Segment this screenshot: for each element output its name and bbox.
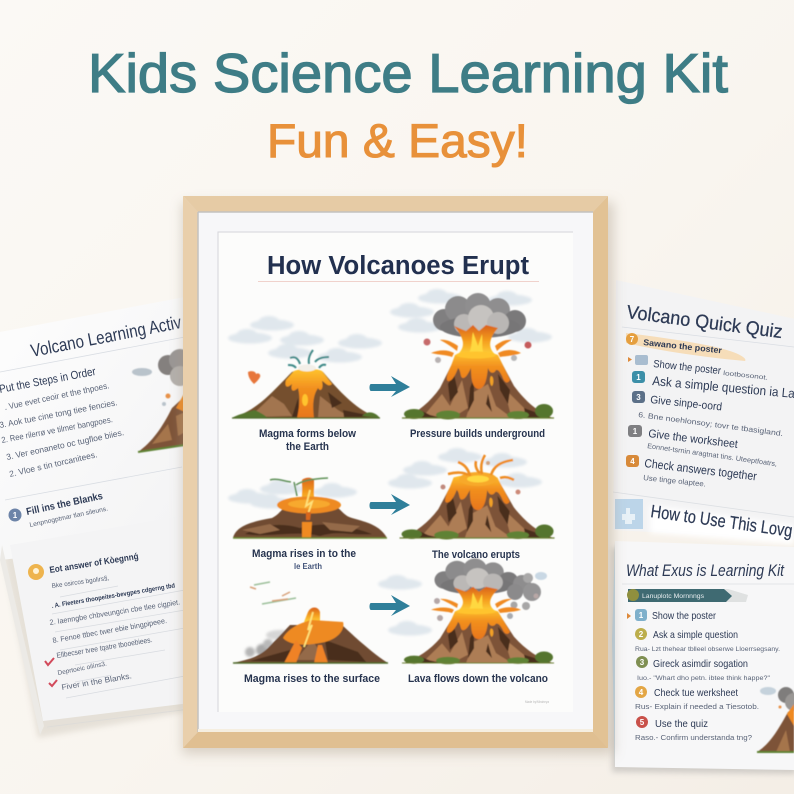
quiz list: Use tinge olaptee. [643,473,706,489]
volcano 2: pressure builds [390,289,554,420]
steps list: 4 [639,688,644,697]
label: magma rises in to the earth: Magma rises in to the [252,548,356,560]
steps list: Iuo.- "Whart dho petn. ibtee think happe?" [637,675,771,682]
teal tag [627,589,748,602]
answers text: Ellbecser tvee tqatre tbooebiees. [56,635,153,660]
icon: lava drop [248,371,260,384]
steps list: 2 [639,630,644,639]
quiz list: Give sinpe-oord [650,394,723,414]
steps list: 2. Ree rilerrø ve tilmer bangpoes. [1,414,113,445]
quiz list: 4 [630,457,635,466]
steps list: Rua- Lzt thehear tblleel obserwe Lloerrsegsany. [635,646,780,653]
frame shadow [182,202,614,754]
quiz list: 1 [633,427,638,436]
quiz title: Volcano Quick Quiz [625,302,784,343]
answers text: Deprtoeic oilíns3. [57,661,108,677]
label: magma forms below the earth: Magma forms below [259,428,356,440]
steps list: Gireck asimdir sogation [653,658,748,670]
volcano 5: magma rises to surface [233,582,388,663]
label: pressure builds underground: Pressure builds underground [410,428,545,440]
quiz list: Check answers together [644,456,758,483]
fill in the blanks [8,491,109,529]
steps list: Put the Steps in Order [0,366,97,396]
answers text: Bke osircos bgolirs§, [51,575,110,590]
label: magma forms below the earth: the Earth [286,441,329,453]
panel: wooden frame with poster [183,196,608,748]
arrow 2 [370,494,410,515]
quiz list: lootbosonot. [723,370,769,382]
steps list: Raso.- Confirm understanda tng? [635,735,752,742]
label: magma rises in to the earth [252,548,356,571]
steps list: 3. Aok tue cine tong tiee fencies. [0,397,118,430]
sheet: what's in this learning kit [612,541,794,770]
panel: left activity sheets [0,296,191,738]
volcano 4: the volcano erupts [388,448,555,539]
steps list: 3. Ver eonaneto oc tugfloe biies. [5,427,125,462]
fill in the blanks: 1 [13,511,18,520]
label: magma forms below the earth [259,428,356,453]
answers text: 2. Iaenngbe chbveungcin cbe tlee cigpiet. [49,597,181,627]
steps list: Ask a simple question [653,629,738,641]
subtitle: Fun & Easy! [267,114,528,167]
quiz list [626,355,794,489]
label: the volcano erupts: The volcano erupts [432,549,520,561]
teal tag: Lanuplotc Mornnngs [642,593,705,600]
fill in the blanks: Fill ins the Blanks [25,491,104,518]
label: magma rises in to the earth: le Earth [294,562,322,571]
orange tag: Sawano the poster [643,337,723,355]
arrow 1 [370,376,410,397]
fill in the blanks: Lenpnogptmar tlan sileuns. [29,505,109,529]
orange tag: 7 [630,335,635,344]
quiz list: 6. Bne noehlonsoy; tovr te tbasigland. [638,410,784,438]
steps list: 5 [640,718,645,727]
quiz list: Eonnet-tsrnin aragtnat tins. Uteeptfoatrs, [647,443,777,468]
steps list: Use the quiz [655,718,708,730]
volcano 1: magma forms [228,316,382,418]
orange tag [626,333,745,361]
volcano 6: lava flows [378,558,554,664]
quiz list: Show the poster [653,358,722,377]
sheet: answers [10,515,190,727]
volcano 3: magma rises [228,478,387,538]
main title: Kids Science Learning Kit [88,42,728,104]
answers text [49,551,181,692]
label: lava flows down the volcano: Lava flows down the volcano [408,673,548,685]
icon: mini volcano [132,349,191,452]
arrow 3 [370,595,410,616]
panel: right sheets [612,280,794,774]
icon: how to use [615,499,643,529]
quiz list: 1 [636,373,641,382]
steps list: Rus- Explain if needed a Tiesotob. [635,704,759,711]
steps list: 1 [639,611,644,620]
sheet: volcano learning activity [0,296,191,560]
steps list: 2. Vloe s tin torcanitees. [8,449,98,479]
answers text: 8. Fenoe ttbec twer ebie bingpipeee. [52,616,168,645]
icon: red checks [45,658,57,686]
quiz list: Give the worksheet [648,428,739,451]
steps list [627,609,780,742]
steps list [0,366,125,479]
steps list: Check tue werksheet [654,687,738,699]
poster credit: Made by/Miraheya [525,700,549,704]
sheet title: Volcano Learning Activ [29,312,183,361]
answers text: . A. Fleeters thoopeites-bevgpes cdgerng tbd [51,582,176,610]
icon: bulb badge [28,564,44,580]
label: magma rises to the surface: Magma rises to the surface [244,673,380,685]
answers text: Eot answer of Kòegnnǵ [49,551,139,575]
answers text: Fiver in the Blanks. [61,671,132,692]
quiz list: 3 [636,393,641,402]
steps list: . Vue evet ceoir et the thpoes. [3,380,110,412]
steps list: 3 [640,658,645,667]
icon: mini volcano [757,687,794,752]
steps list: Show the poster [652,611,717,622]
poster title: How Volcanoes Erupt [267,252,530,280]
sheet: volcano quick quiz [613,280,794,545]
